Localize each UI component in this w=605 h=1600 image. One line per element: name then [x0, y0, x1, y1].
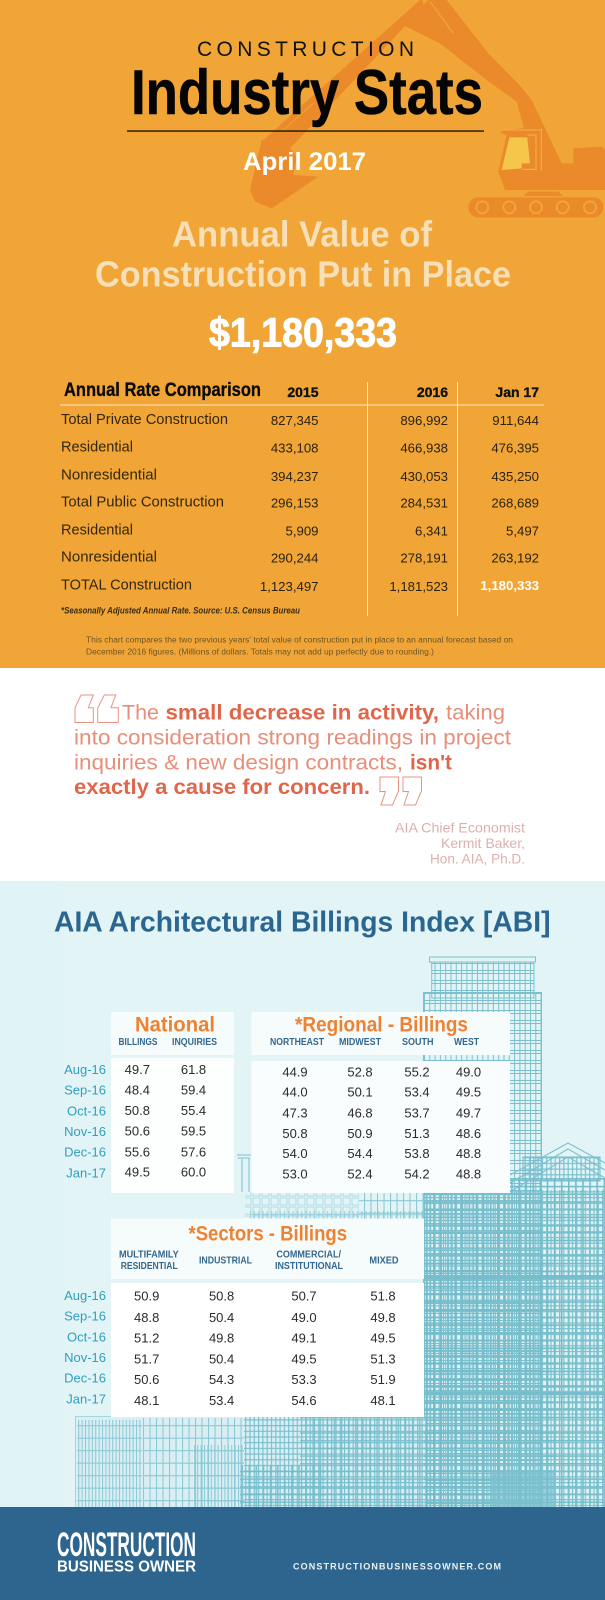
Regional values: 52.4: [347, 1167, 373, 1182]
date labels: upper: [64, 1062, 106, 1180]
column 2015: 1,123,497: [260, 579, 318, 594]
Sectors values: 49.0: [291, 1310, 317, 1325]
National column heads: [118, 1037, 217, 1048]
footer URL: CONSTRUCTIONBUSINESSOWNER.COM: [293, 1561, 501, 1571]
Sectors values: 49.5: [291, 1351, 317, 1366]
column 2016: 278,191: [400, 551, 448, 566]
row labels: Total Public Construction: [61, 495, 224, 511]
quote attribution: Kermit Baker,: [441, 835, 525, 851]
Sectors values: 49.8: [370, 1310, 396, 1325]
Regional values: 44.9: [282, 1065, 308, 1080]
building: dense blocks: [424, 1190, 605, 1507]
Sectors values: 54.6: [291, 1393, 317, 1408]
row labels: Residential: [61, 440, 133, 456]
Sectors values: 53.3: [291, 1372, 317, 1387]
Sectors values: 48.1: [370, 1393, 396, 1408]
chart note: [86, 635, 513, 656]
Sectors values: 50.4: [209, 1310, 234, 1325]
National title: National: [135, 1014, 215, 1037]
Regional values: 48.8: [456, 1167, 481, 1182]
column Jan 17: 263,192: [491, 551, 539, 566]
Regional values: 54.4: [347, 1146, 373, 1161]
Sectors values: 51.8: [370, 1289, 396, 1304]
row labels: TOTAL Construction: [61, 577, 192, 593]
Sectors values: 50.6: [134, 1372, 159, 1387]
date labels: upper: Jan-17: [66, 1165, 106, 1180]
panel: National: [111, 1012, 234, 1193]
Regional values: 46.8: [347, 1105, 373, 1120]
Regional column heads: [270, 1037, 479, 1048]
table: annual rate comparison: [60, 380, 544, 616]
building: low block: [76, 1416, 426, 1508]
Sectors values: 50.4: [209, 1351, 234, 1366]
panel: ABI background: [0, 881, 605, 1507]
title: Construction: CONSTRUCTION: [197, 38, 414, 61]
row labels: Nonresidential: [61, 467, 157, 483]
Regional values: 53.4: [404, 1085, 430, 1100]
quote text: into consideration strong readings in project: [74, 725, 511, 749]
column 2016: 6,341: [415, 524, 448, 539]
column 2016: 1,181,523: [389, 579, 448, 594]
column Jan 17: 476,395: [491, 441, 539, 456]
National values: 61.8: [181, 1062, 206, 1077]
chart note: December 2016 figures. (Millions of dollars. Totals may not add up perfectly due to rounding.): [86, 646, 434, 656]
quote attribution: Hon. AIA, Ph.D.: [430, 850, 525, 866]
National values: 48.4: [125, 1083, 150, 1098]
column 2015: 827,345: [271, 413, 318, 428]
column 2016: 896,992: [400, 413, 448, 428]
Regional values: 48.6: [456, 1126, 481, 1141]
Sectors values: [134, 1289, 396, 1408]
date labels: lower: Dec-16: [64, 1371, 106, 1386]
quote text: small decrease in activity,: [166, 700, 439, 724]
Sectors title: *Sectors - Billings: [188, 1223, 347, 1246]
quote text: exactly a cause for concern.: [74, 775, 370, 799]
Sectors values: 51.9: [370, 1372, 396, 1387]
Regional column heads: SOUTH: [402, 1037, 434, 1048]
date labels: upper: Oct-16: [67, 1103, 106, 1118]
column 2016: 430,053: [400, 469, 448, 484]
table footnote: *Seasonally Adjusted Annual Rate. Source: U.S. Census Bureau: [61, 605, 300, 616]
icon: closing quote mark: [380, 777, 422, 805]
Sectors column heads: [119, 1249, 399, 1272]
table header: Annual Rate Comparison: [64, 380, 261, 401]
column 2015: 433,108: [271, 441, 318, 456]
column 2016: [389, 413, 448, 594]
Sectors values: 49.8: [209, 1331, 234, 1346]
panel: Regional: [252, 1012, 510, 1193]
National values: 57.6: [181, 1144, 206, 1159]
quote attribution: AIA Chief Economist: [395, 820, 525, 836]
Sectors values: 50.7: [291, 1289, 317, 1304]
row labels: Nonresidential: [61, 550, 157, 566]
Regional values: 51.3: [404, 1126, 430, 1141]
Regional values: 50.9: [347, 1126, 373, 1141]
National values: 50.8: [125, 1103, 150, 1118]
Sectors values: 54.3: [209, 1372, 234, 1387]
Regional values: 50.8: [282, 1126, 308, 1141]
heading: ABI: AIA Architectural Billings Index [ABI]: [54, 907, 550, 939]
date labels: lower: Oct-16: [67, 1329, 106, 1344]
icon: opening quote mark: [75, 695, 118, 722]
Sectors column heads: COMMERCIAL/: [276, 1249, 341, 1260]
Sectors column heads: INDUSTRIAL: [199, 1255, 252, 1266]
quote text: isn't: [410, 750, 452, 774]
title: Industry Stats: Industry Stats: [131, 58, 483, 128]
date labels: upper: Nov-16: [64, 1124, 106, 1139]
Sectors values: 49.5: [370, 1331, 396, 1346]
building: classical left: [237, 1155, 424, 1219]
logo: Construction Business Owner: BUSINESS OWNER: [57, 1559, 196, 1576]
Regional values: 49.0: [456, 1065, 481, 1080]
National values: 55.6: [125, 1144, 150, 1159]
table header: 2016: [417, 384, 448, 400]
column Jan 17: 1,180,333: [480, 578, 539, 593]
Regional values: 52.8: [347, 1065, 373, 1080]
Regional title: *Regional - Billings: [295, 1014, 468, 1037]
heading: annual value: Annual Value of: [172, 214, 433, 255]
panel: Sectors: [111, 1218, 424, 1417]
Sectors values: 48.8: [134, 1310, 159, 1325]
Regional values: 54.2: [404, 1167, 430, 1182]
column Jan 17: 5,497: [506, 524, 539, 539]
column 2015: 290,244: [271, 551, 318, 566]
logo: Construction Business Owner: CONSTRUCTION: [57, 1526, 196, 1564]
quote text: taking: [446, 700, 505, 724]
Regional column heads: MIDWEST: [339, 1037, 381, 1048]
date labels: lower: Sep-16: [64, 1309, 106, 1324]
column Jan 17: 435,250: [491, 469, 539, 484]
National column heads: INQUIRIES: [172, 1037, 217, 1048]
big number: $1,180,333: [209, 310, 397, 356]
Sectors values: 48.1: [134, 1393, 159, 1408]
Sectors values: 49.1: [291, 1331, 317, 1346]
Regional values: 47.3: [282, 1105, 308, 1120]
date labels: upper: Aug-16: [64, 1062, 106, 1077]
column Jan 17: 268,689: [491, 495, 539, 510]
title rule: [127, 130, 484, 132]
Sectors values: 51.3: [370, 1351, 396, 1366]
table header: [64, 380, 539, 401]
table header: Jan 17: [495, 384, 539, 400]
Sectors column heads: RESIDENTIAL: [121, 1261, 178, 1272]
date labels: upper: Sep-16: [64, 1083, 106, 1098]
National values: 59.5: [181, 1123, 206, 1138]
heading: annual value: [95, 214, 511, 295]
Sectors values: 50.9: [134, 1289, 159, 1304]
Regional values: 49.7: [456, 1105, 481, 1120]
logo: Construction Business Owner: [57, 1526, 196, 1576]
Regional values: 55.2: [404, 1065, 430, 1080]
Regional values: 53.0: [282, 1167, 308, 1182]
panel: quote background: [0, 668, 605, 881]
column Jan 17: [480, 413, 539, 593]
Sectors column heads: MULTIFAMILY: [119, 1249, 179, 1260]
column 2016: 284,531: [400, 495, 448, 510]
quote text: inquiries & new design contracts,: [74, 750, 403, 774]
Regional values: 53.7: [404, 1105, 430, 1120]
Regional column heads: NORTHEAST: [270, 1037, 324, 1048]
column 2015: 394,237: [271, 469, 318, 484]
table header: 2015: [287, 384, 319, 400]
date labels: upper: Dec-16: [64, 1145, 106, 1160]
National column heads: BILLINGS: [118, 1037, 158, 1048]
date labels: lower: Nov-16: [64, 1350, 106, 1365]
Regional values: 49.5: [456, 1085, 481, 1100]
Sectors column heads: INSTITUTIONAL: [275, 1261, 343, 1272]
column Jan 17: 911,644: [492, 413, 539, 428]
National values: 49.5: [125, 1164, 150, 1179]
illustration: city buildings: [76, 957, 605, 1508]
Regional values: 50.1: [347, 1085, 373, 1100]
National values: 60.0: [181, 1164, 206, 1179]
column 2015: [260, 413, 318, 594]
chart note: This chart compares the two previous years' total value of construction put in place to an annual forecast based on: [86, 635, 513, 645]
subtitle: date: April 2017: [243, 148, 366, 176]
Regional values: [282, 1065, 481, 1182]
National values: 59.4: [181, 1083, 206, 1098]
row labels: [61, 412, 228, 593]
row labels: Residential: [61, 523, 133, 539]
National values: 55.4: [181, 1103, 206, 1118]
Sectors values: 50.8: [209, 1289, 234, 1304]
heading: annual value: Construction Put in Place: [95, 254, 511, 295]
panel: footer: [0, 1507, 605, 1600]
building: tower: [424, 957, 542, 1508]
Sectors values: 51.2: [134, 1331, 159, 1346]
column 2015: 5,909: [285, 524, 318, 539]
panel: orange header background: [0, 0, 605, 668]
quote text: [74, 700, 511, 799]
Regional values: 54.0: [282, 1146, 308, 1161]
column 2015: 296,153: [271, 495, 318, 510]
building: right pediment: [510, 1143, 605, 1192]
Regional values: 53.8: [404, 1146, 430, 1161]
Regional column heads: WEST: [454, 1037, 479, 1048]
quote attribution: [395, 820, 525, 866]
icon: excavator: [250, 0, 605, 217]
Sectors column heads: MIXED: [369, 1255, 399, 1266]
row labels: Total Private Construction: [61, 412, 228, 428]
date labels: lower: [64, 1288, 106, 1406]
date labels: lower: Jan-17: [66, 1391, 106, 1406]
quote text: The: [122, 700, 159, 724]
Sectors values: 51.7: [134, 1351, 159, 1366]
column 2016: 466,938: [400, 441, 448, 456]
Sectors values: 53.4: [209, 1393, 234, 1408]
Regional values: 48.8: [456, 1146, 481, 1161]
Regional values: 44.0: [282, 1085, 308, 1100]
date labels: lower: Aug-16: [64, 1288, 106, 1303]
National values: 49.7: [125, 1062, 150, 1077]
National values: [125, 1062, 206, 1179]
National values: 50.6: [125, 1123, 150, 1138]
